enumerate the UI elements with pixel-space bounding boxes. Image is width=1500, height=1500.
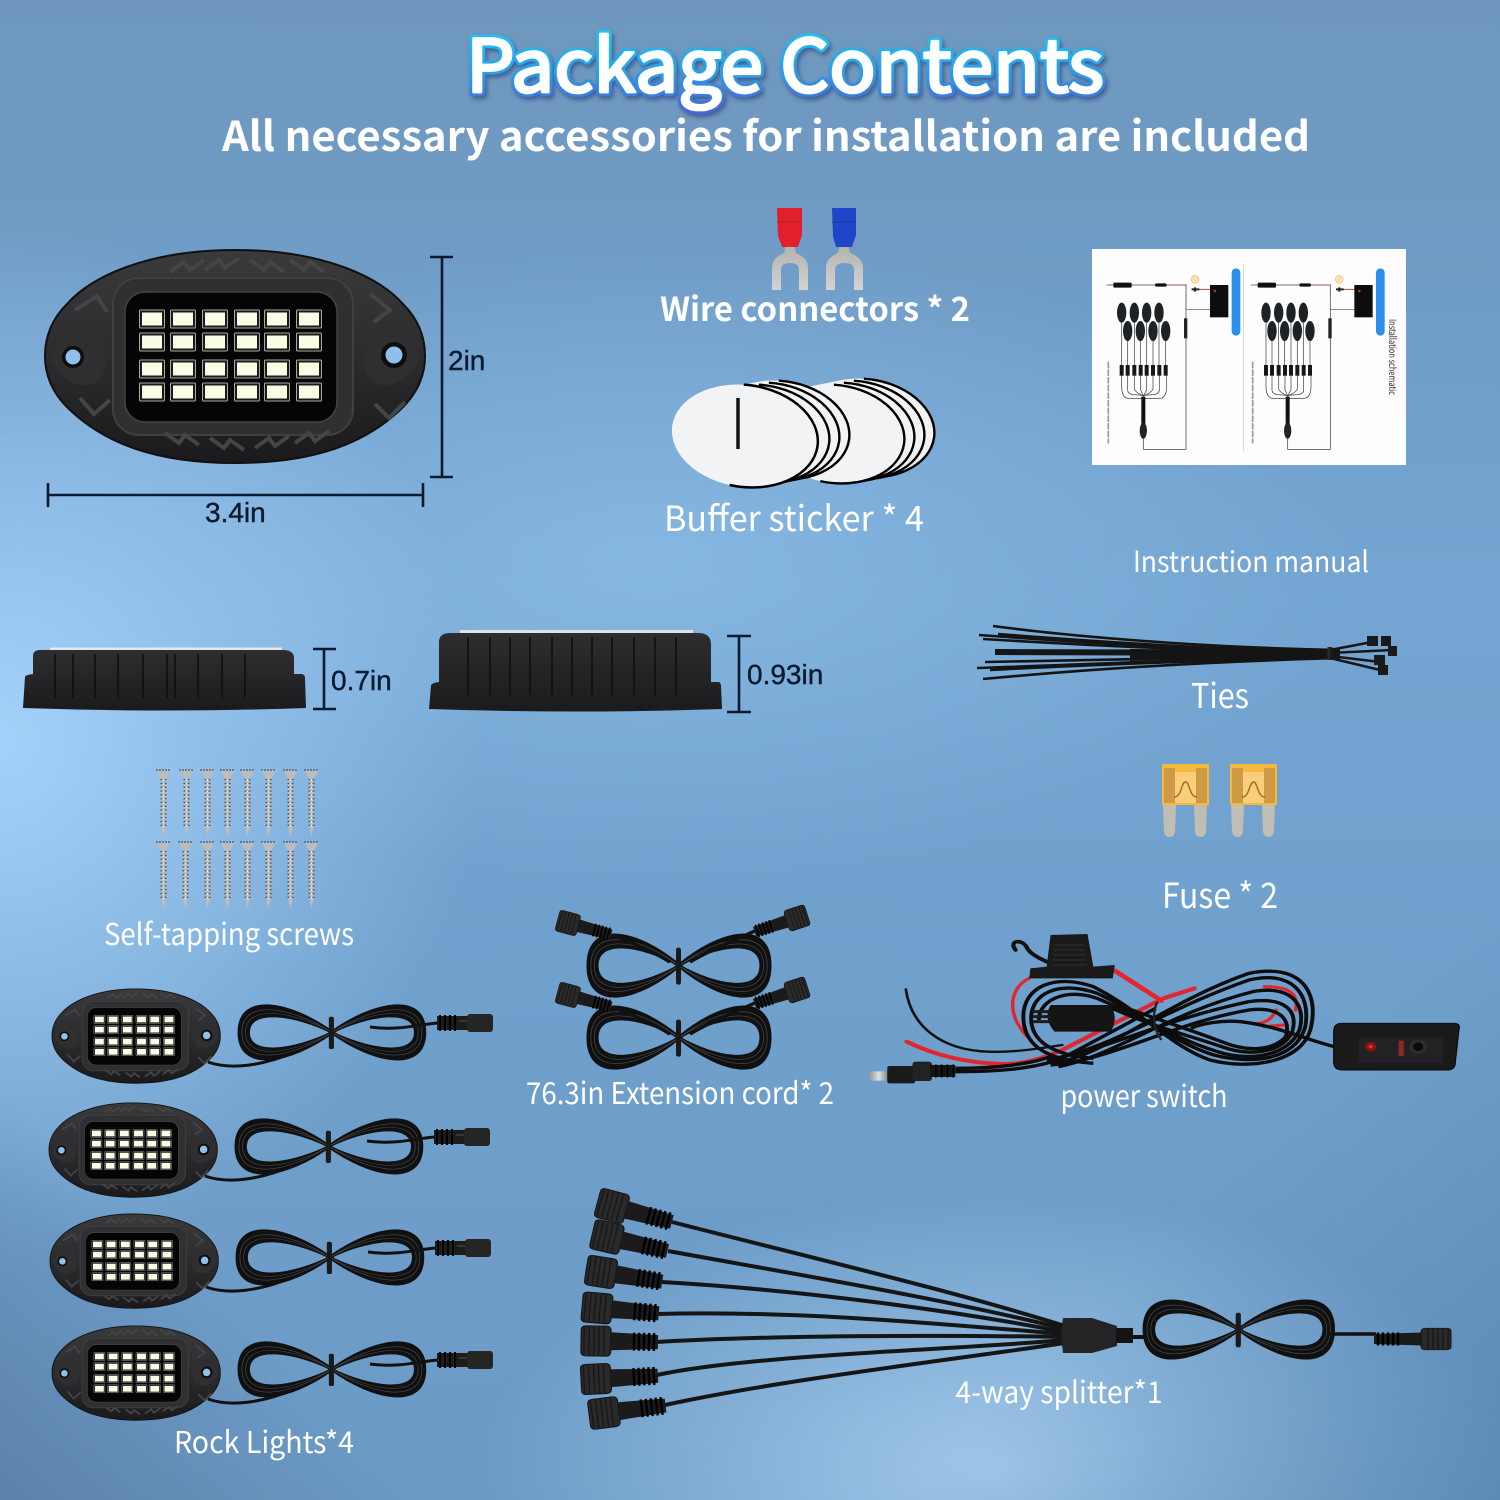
switch box <box>1334 1023 1459 1070</box>
rock light front view with dimensions: 2in <box>448 345 485 376</box>
rock lights with cables <box>49 989 493 1462</box>
label: Self-tapping screws <box>104 910 354 954</box>
side view: 0.7in rock light: 0.7in <box>331 665 392 696</box>
DC plug <box>869 1071 889 1081</box>
fuse holder <box>1029 934 1115 978</box>
icon: fuse left <box>1162 764 1209 837</box>
label: Buffer sticker * 4 <box>664 491 924 542</box>
wire connectors <box>660 208 970 331</box>
cable ties <box>977 626 1397 718</box>
buffer stickers <box>664 370 941 542</box>
label: Ties <box>1191 669 1249 718</box>
side view: 0.93in rock light <box>429 630 823 712</box>
icon: red fork terminal <box>772 208 808 290</box>
4-way splitter <box>580 1188 1451 1430</box>
splitter branch cables <box>657 1222 1065 1405</box>
coil <box>1144 1301 1333 1358</box>
label: Rock Lights*4 <box>174 1418 354 1462</box>
self-tapping screws <box>104 770 354 954</box>
power switch <box>869 934 1459 1116</box>
title: Package Contents <box>466 8 1104 114</box>
icon: blue fork terminal <box>826 208 863 290</box>
extension cords <box>526 904 834 1113</box>
label: Fuse * 2 <box>1162 868 1278 919</box>
rock light front view with dimensions <box>45 250 485 528</box>
loose wires <box>906 942 1296 1064</box>
side view: 0.7in rock light <box>23 648 392 710</box>
instruction manual schematic: Installation schematic <box>1386 319 1401 395</box>
hub <box>1062 1318 1117 1353</box>
ferrite <box>1047 1005 1115 1032</box>
cable bundle <box>955 971 1313 1072</box>
end connector <box>1374 1328 1451 1350</box>
label: 76.3in Extension cord* 2 <box>526 1069 834 1113</box>
rock light front view with dimensions: 3.4in <box>205 497 266 528</box>
label: Wire connectors * 2 <box>660 283 970 331</box>
icon: fuse right <box>1230 764 1277 837</box>
connector heads <box>580 1188 676 1430</box>
fuses <box>1162 764 1278 919</box>
subtitle: All necessary accessories for installation are included <box>221 103 1310 163</box>
instruction manual schematic <box>1092 249 1406 581</box>
title: Package Contents <box>466 8 1104 114</box>
label: 4-way splitter*1 <box>956 1368 1162 1412</box>
side view: 0.93in rock light: 0.93in <box>747 659 823 690</box>
label: power switch <box>1060 1072 1228 1116</box>
label: Instruction manual <box>1133 539 1369 581</box>
cable to switch <box>1191 1021 1334 1047</box>
